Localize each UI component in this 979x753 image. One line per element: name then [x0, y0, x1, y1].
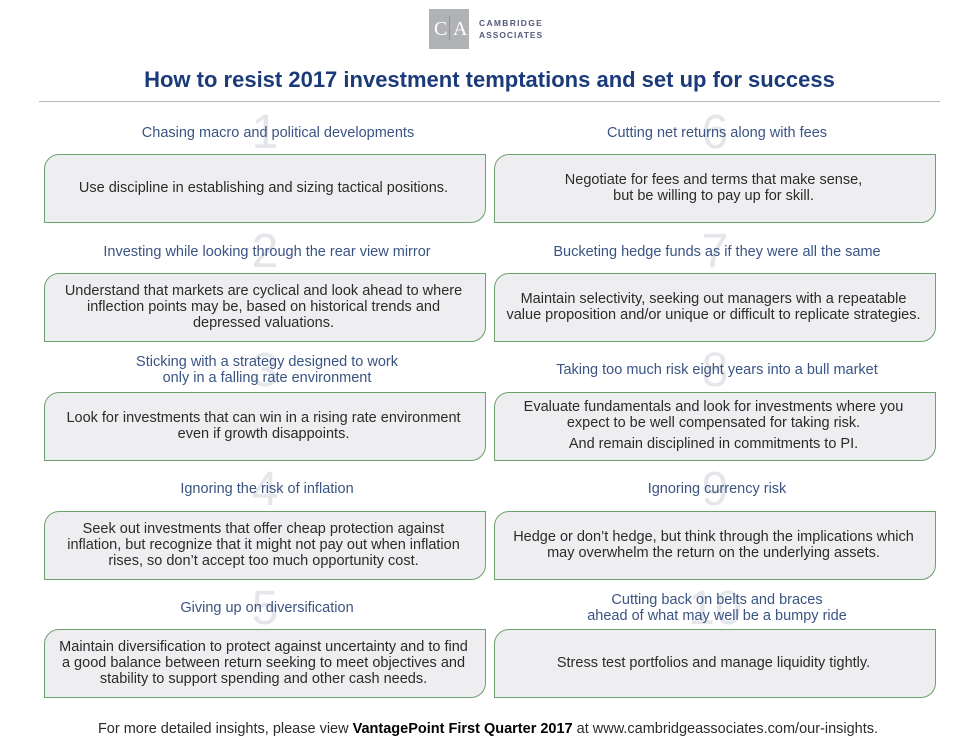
item 7: [494, 225, 936, 342]
heading 10: Cutting back on belts and braces: [611, 592, 823, 608]
heading 10: [587, 592, 847, 624]
number 4: 4: [252, 463, 278, 516]
advice 10: Stress test portfolios and manage liquidity tightly.: [557, 654, 870, 670]
advice 9: Hedge or don’t hedge, but think through the implications which: [513, 528, 914, 544]
heading 3: Sticking with a strategy designed to work: [136, 354, 398, 370]
advice 8: [494, 392, 936, 461]
logo wordmark: CAMBRIDGE: [479, 18, 543, 28]
advice 5: [44, 629, 486, 698]
logo wordmark: ASSOCIATES: [479, 30, 543, 40]
item 9: [494, 463, 936, 580]
number 1: 1: [252, 106, 278, 159]
advice 8: And remain disciplined in commitments to PI.: [569, 436, 858, 452]
advice 3: even if growth disappoints.: [178, 426, 349, 442]
heading 9: Ignoring currency risk: [648, 481, 786, 497]
advice 2: inflection points may be, based on historical trends and: [87, 298, 440, 314]
heading 5: Giving up on diversification: [180, 600, 354, 616]
advice 1: [44, 154, 486, 223]
advice 3: [44, 392, 486, 461]
item 1: [44, 106, 486, 223]
item 10: [494, 582, 936, 698]
heading 6: Cutting net returns along with fees: [607, 125, 827, 141]
heading 3: [136, 354, 398, 386]
advice 1: Use discipline in establishing and sizing tactical positions.: [79, 180, 448, 196]
logo wordmark: [479, 18, 543, 40]
advice 7: Maintain selectivity, seeking out managers with a repeatable: [521, 290, 906, 306]
advice 3: Look for investments that can win in a rising rate environment: [66, 410, 461, 426]
advice 2: [44, 273, 486, 342]
heading 3: only in a falling rate environment: [163, 370, 371, 386]
number 9: 9: [702, 463, 728, 516]
advice 8: Evaluate fundamentals and look for investments where you: [524, 399, 903, 415]
number 2: 2: [252, 225, 278, 278]
advice 6: Negotiate for fees and terms that make sense,: [565, 172, 862, 188]
footer note: For more detailed insights, please view VantagePoint First Quarter 2017 at www.cambridgeassociates.com/our-insights.: [98, 721, 878, 737]
advice 4: [44, 511, 486, 580]
heading 7: Bucketing hedge funds as if they were all the same: [553, 244, 881, 260]
advice 5: Maintain diversification to protect against uncertainty and to find: [59, 638, 468, 654]
number 10: 10: [688, 582, 742, 635]
item 3: [44, 344, 486, 461]
item 5: [44, 582, 486, 698]
advice 7: value proposition and/or unique or difficult to replicate strategies.: [506, 306, 921, 322]
logo: Cambridge Associates: [429, 9, 543, 49]
advice 2: depressed valuations.: [193, 314, 334, 330]
item 4: [44, 463, 486, 580]
advice 10: [494, 629, 936, 698]
heading 1: Chasing macro and political developments: [142, 125, 414, 141]
number 6: 6: [702, 106, 728, 159]
advice 4: inflation, but recognize that it might not pay out when inflation: [67, 536, 460, 552]
advice 2: Understand that markets are cyclical and look ahead to where: [65, 282, 462, 298]
heading 2: Investing while looking through the rear view mirror: [103, 244, 431, 260]
heading 8: Taking too much risk eight years into a bull market: [556, 362, 878, 378]
logo mark: [429, 9, 469, 49]
item 6: [494, 106, 936, 223]
title: How to resist 2017 investment temptations and set up for success: [144, 67, 835, 92]
heading 10: ahead of what may well be a bumpy ride: [587, 608, 847, 624]
logo mark: A: [453, 18, 467, 40]
logo mark: C: [434, 18, 447, 40]
advice 4: rises, so don’t accept too much opportunity cost.: [108, 552, 419, 568]
advice 6: but be willing to pay up for skill.: [613, 188, 814, 204]
advice 4: Seek out investments that offer cheap protection against: [83, 520, 444, 536]
advice 9: [494, 511, 936, 580]
number 8: 8: [702, 344, 728, 397]
advice 5: stability to support spending and other cash needs.: [100, 670, 427, 686]
number 5: 5: [252, 582, 278, 635]
item 2: [44, 225, 486, 342]
number 3: 3: [252, 344, 278, 397]
item 8: [494, 344, 936, 461]
number 7: 7: [702, 225, 728, 278]
advice 5: a good balance between return seeking to meet objectives and: [62, 654, 465, 670]
advice 9: may overwhelm the return on the underlying assets.: [547, 544, 880, 560]
advice 7: [494, 273, 936, 342]
advice 8: expect to be well compensated for taking risk.: [567, 415, 860, 431]
heading 4: Ignoring the risk of inflation: [180, 481, 354, 497]
advice 6: [494, 154, 936, 223]
